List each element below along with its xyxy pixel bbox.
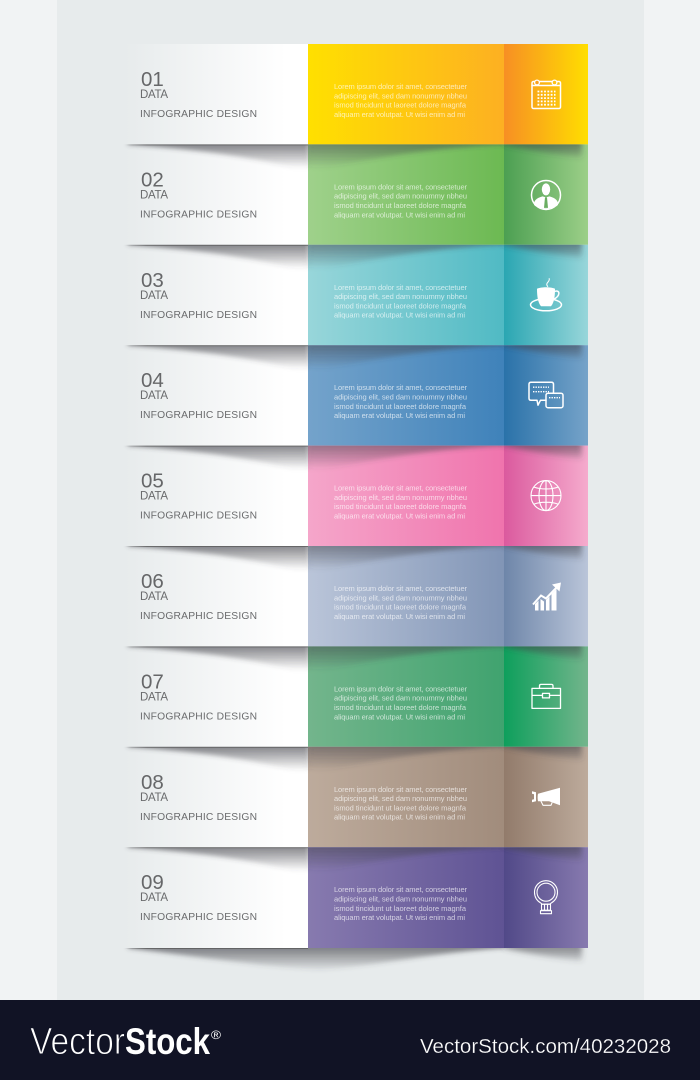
label DATA: DATA	[140, 892, 168, 904]
panel: icon band 08	[504, 747, 588, 847]
icon: megaphone	[532, 788, 560, 805]
body text 09: Lorem ipsum dolor sit amet, consectetuer	[334, 885, 468, 894]
panel: icon band 05	[504, 446, 588, 546]
footer logo: ®	[211, 1028, 221, 1042]
icon: globe	[531, 481, 561, 511]
row 01	[125, 44, 588, 144]
body text 07: aliquam erat volutpat. Ut wisi enim ad mi	[334, 712, 465, 721]
footer logo	[30, 1021, 221, 1063]
footer bar	[0, 1000, 700, 1080]
footer logo: Stock	[125, 1021, 210, 1062]
body text 04: adipiscing elit, sed dam nonummy nbheu	[334, 393, 467, 402]
panel: label 04	[125, 345, 308, 446]
body text 05: aliquam erat volutpat. Ut wisi enim ad mi	[334, 512, 465, 521]
label INFOGRAPHIC DESIGN: INFOGRAPHIC DESIGN	[140, 410, 257, 421]
label INFOGRAPHIC DESIGN: INFOGRAPHIC DESIGN	[140, 711, 257, 722]
body text 01	[334, 82, 468, 119]
body text 06: adipiscing elit, sed dam nonummy nbheu	[334, 593, 467, 602]
body text 04: Lorem ipsum dolor sit amet, consectetuer	[334, 383, 468, 392]
number 01: 01	[141, 68, 164, 91]
body text 05	[334, 484, 468, 520]
body text 03: ismod tincidunt ut laoreet dolore magnfa	[334, 301, 467, 310]
panel: label 06	[125, 546, 308, 646]
panel: label 09	[125, 847, 308, 948]
body text 06: Lorem ipsum dolor sit amet, consectetuer	[334, 584, 468, 593]
label INFOGRAPHIC DESIGN: INFOGRAPHIC DESIGN	[140, 812, 257, 823]
body text 02: aliquam erat volutpat. Ut wisi enim ad mi	[334, 210, 465, 219]
body text 07	[334, 684, 468, 721]
panel: icon band 01	[504, 44, 588, 144]
footer logo: Vector	[30, 1021, 125, 1063]
number 02: 02	[141, 168, 164, 191]
body text 02: ismod tincidunt ut laoreet dolore magnfa	[334, 201, 467, 210]
row 08	[125, 739, 588, 847]
row 09	[125, 839, 588, 948]
number 04: 04	[141, 369, 164, 392]
panel: icon band 04	[504, 345, 588, 446]
label INFOGRAPHIC DESIGN: INFOGRAPHIC DESIGN	[140, 310, 257, 321]
panel: text band 04	[308, 345, 504, 446]
panel: icon band 09	[504, 847, 588, 948]
shadow 02	[126, 144, 586, 168]
body text 08: ismod tincidunt ut laoreet dolore magnfa	[334, 803, 467, 812]
label INFOGRAPHIC DESIGN: INFOGRAPHIC DESIGN	[140, 511, 257, 522]
row 07	[125, 638, 588, 747]
number 06: 06	[141, 570, 164, 593]
label DATA: DATA	[140, 792, 168, 804]
body text 06: aliquam erat volutpat. Ut wisi enim ad mi	[334, 612, 465, 621]
body text 02: adipiscing elit, sed dam nonummy nbheu	[334, 192, 467, 201]
body text 04: ismod tincidunt ut laoreet dolore magnfa	[334, 402, 467, 411]
panel: icon band 03	[504, 245, 588, 345]
body text 09: ismod tincidunt ut laoreet dolore magnfa	[334, 904, 467, 913]
label DATA: DATA	[140, 491, 168, 503]
body text 09: adipiscing elit, sed dam nonummy nbheu	[334, 895, 467, 904]
body text 08: adipiscing elit, sed dam nonummy nbheu	[334, 794, 467, 803]
panel: label 08	[125, 747, 308, 847]
body text 03	[334, 283, 468, 320]
body text 02	[334, 182, 468, 219]
body text 03: adipiscing elit, sed dam nonummy nbheu	[334, 292, 467, 301]
row 03	[125, 237, 588, 345]
shadow 09	[126, 847, 585, 870]
panel: text band 09	[308, 847, 504, 948]
body text 05: ismod tincidunt ut laoreet dolore magnfa	[334, 502, 467, 511]
bottom shadow	[125, 948, 586, 970]
panel: text band 08	[308, 747, 504, 847]
label INFOGRAPHIC DESIGN: INFOGRAPHIC DESIGN	[140, 109, 257, 120]
panel: icon band 06	[504, 546, 588, 646]
body text 01: adipiscing elit, sed dam nonummy nbheu	[334, 91, 467, 100]
shadow 05	[126, 446, 586, 469]
panel: text band 02	[308, 144, 504, 245]
panel: text band 06	[308, 546, 504, 646]
body text 08: aliquam erat volutpat. Ut wisi enim ad mi	[334, 813, 465, 822]
body text 01: Lorem ipsum dolor sit amet, consectetuer	[334, 82, 468, 91]
body text 06: ismod tincidunt ut laoreet dolore magnfa	[334, 603, 467, 612]
number 03: 03	[141, 269, 164, 292]
body text 09: aliquam erat volutpat. Ut wisi enim ad mi	[334, 913, 465, 922]
row 02	[125, 136, 588, 245]
number 09: 09	[141, 871, 164, 894]
body text 07: ismod tincidunt ut laoreet dolore magnfa	[334, 703, 467, 712]
panel: text band 05	[308, 446, 504, 546]
label DATA: DATA	[140, 290, 168, 302]
body text 05: Lorem ipsum dolor sit amet, consectetuer	[334, 484, 468, 493]
label INFOGRAPHIC DESIGN: INFOGRAPHIC DESIGN	[140, 209, 257, 220]
body text 05: adipiscing elit, sed dam nonummy nbheu	[334, 493, 467, 502]
number 08: 08	[141, 771, 164, 794]
panel: icon band 07	[504, 646, 588, 747]
body text 04	[334, 383, 468, 420]
footer reference id: VectorStock.com/40232028	[420, 1035, 671, 1058]
label INFOGRAPHIC DESIGN: INFOGRAPHIC DESIGN	[140, 611, 257, 622]
icon: calendar	[532, 80, 560, 108]
icon: light bulb	[534, 881, 558, 914]
label DATA: DATA	[140, 89, 168, 101]
panel: text band 01	[308, 44, 504, 144]
icon: briefcase	[532, 684, 560, 708]
body text 08	[334, 785, 468, 822]
body text 03: aliquam erat volutpat. Ut wisi enim ad mi	[334, 311, 465, 320]
panel: label 02	[125, 144, 308, 245]
row 06	[125, 538, 588, 646]
icon: person	[532, 180, 560, 210]
body text 01: ismod tincidunt ut laoreet dolore magnfa	[334, 101, 467, 110]
body text 03: Lorem ipsum dolor sit amet, consectetuer	[334, 283, 468, 292]
shadow 08	[126, 746, 585, 770]
shadow 03	[126, 244, 586, 268]
background panel	[57, 0, 644, 1000]
panel: label 01	[125, 44, 308, 144]
shadow 04	[126, 345, 585, 368]
panel: label 05	[125, 446, 308, 546]
body text 02: Lorem ipsum dolor sit amet, consectetuer	[334, 182, 468, 191]
number 07: 07	[141, 670, 164, 693]
panel: icon band 02	[504, 144, 588, 245]
number 05: 05	[141, 470, 164, 493]
body text 08: Lorem ipsum dolor sit amet, consectetuer	[334, 785, 468, 794]
label DATA: DATA	[140, 591, 168, 603]
body text 07: Lorem ipsum dolor sit amet, consectetuer	[334, 684, 468, 693]
panel: label 07	[125, 646, 308, 747]
icon: coffee cup	[530, 278, 562, 311]
panel: text band 07	[308, 646, 504, 747]
panel: label 03	[125, 245, 308, 345]
icon: chat bubbles	[529, 382, 563, 408]
row 04	[125, 337, 588, 446]
panel: text band 03	[308, 245, 504, 345]
label INFOGRAPHIC DESIGN: INFOGRAPHIC DESIGN	[140, 912, 257, 923]
icon: growth chart	[533, 582, 561, 610]
shadow 07	[126, 646, 585, 670]
label DATA: DATA	[140, 189, 168, 201]
body text 07: adipiscing elit, sed dam nonummy nbheu	[334, 694, 467, 703]
body text 04: aliquam erat volutpat. Ut wisi enim ad mi	[334, 411, 465, 420]
label DATA: DATA	[140, 691, 168, 703]
body text 06	[334, 584, 468, 621]
body text 01: aliquam erat volutpat. Ut wisi enim ad mi	[334, 110, 465, 119]
body text 09	[334, 885, 468, 922]
label DATA: DATA	[140, 390, 168, 402]
row 05	[125, 438, 588, 546]
shadow 06	[126, 546, 586, 570]
